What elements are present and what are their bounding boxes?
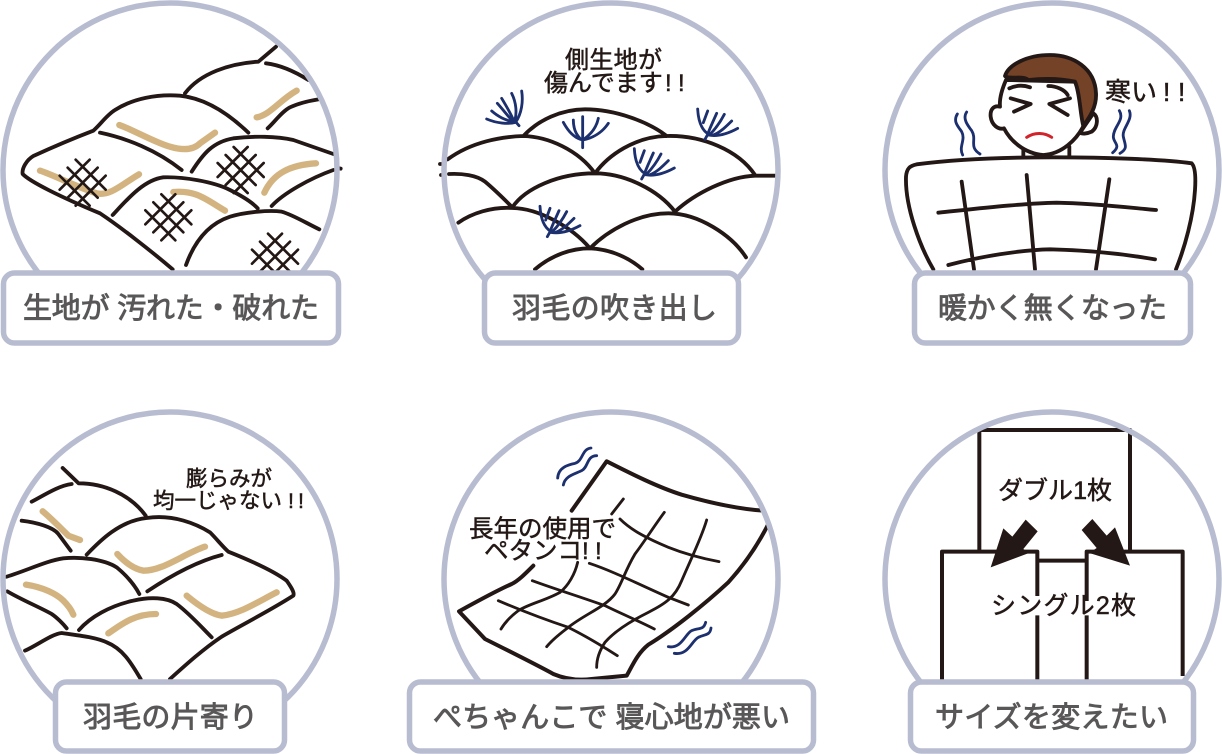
text: singles: シングル2枚	[991, 592, 1136, 620]
panel: dirty or torn fabric	[3, 3, 341, 343]
speech text: !	[678, 70, 685, 97]
illustration: stained and torn quilt	[23, 47, 341, 280]
speech text	[544, 47, 685, 97]
label box: 暖かく無くなった	[938, 292, 1167, 325]
illustration: quilt with uneven filling	[7, 468, 294, 679]
illustration: shivering person under quilt	[906, 55, 1195, 269]
speech text: !	[1163, 77, 1170, 107]
speech text: 長年の使用で	[469, 515, 616, 543]
label box: ぺちゃんこで 寝心地が悪い	[433, 701, 790, 734]
label box: 生地が 汚れた・破れた	[23, 292, 319, 325]
speech text: !	[582, 538, 589, 565]
speech text: 側生地が	[565, 47, 662, 74]
speech text: 傷んでます	[544, 70, 663, 97]
speech text: !	[298, 489, 304, 513]
speech text: !	[595, 538, 602, 565]
arrow: right	[1082, 519, 1130, 566]
label box	[4, 273, 338, 343]
label box	[410, 682, 814, 751]
panel: feathers shifted	[3, 412, 337, 751]
panel: change the size	[885, 412, 1219, 751]
label box: 羽毛の片寄り	[83, 701, 258, 734]
speech text: 均一じゃない	[153, 489, 282, 513]
text: double: ダブル1枚	[998, 477, 1112, 505]
panel: flattened quilt	[410, 412, 814, 751]
label box	[484, 273, 738, 343]
speech text: 寒い	[1105, 77, 1157, 107]
speech text: !	[1178, 77, 1185, 107]
speech text: 膨らみが	[186, 467, 272, 491]
label box	[56, 682, 284, 751]
speech text: !	[288, 489, 294, 513]
illustration: quilt with feathers poking out	[440, 91, 775, 269]
label box	[914, 273, 1190, 343]
panel: feather leakage	[440, 3, 778, 343]
arrow: left	[991, 520, 1038, 567]
illustration: double quilt split into two singles	[942, 430, 1183, 679]
label box: サイズを変えたい	[935, 701, 1168, 734]
speech text: ペタンコ	[484, 538, 582, 565]
label box	[910, 682, 1194, 751]
speech text	[153, 467, 304, 513]
label box: 羽毛の吹き出し	[512, 292, 717, 325]
panel: no longer warm	[885, 3, 1219, 343]
speech text	[469, 515, 616, 565]
speech text: !	[665, 70, 672, 97]
illustration: flat quilt sheet	[459, 448, 768, 680]
